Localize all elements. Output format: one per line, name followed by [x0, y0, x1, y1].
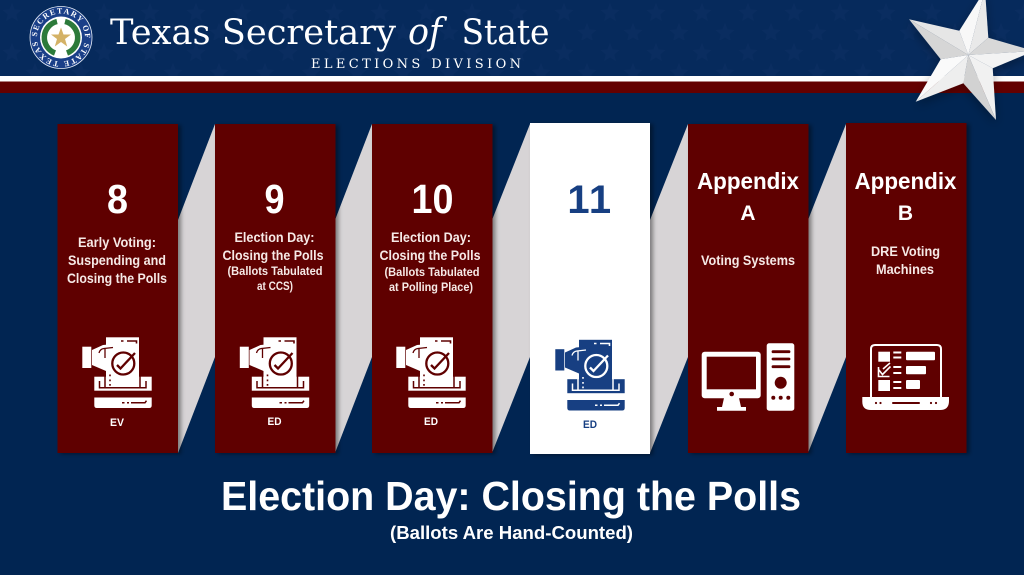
subheading: Ballots Are Hand-Counted: (Ballots Are Hand-Counted): [390, 523, 633, 543]
panel: chapter 9: at CCS): [257, 281, 293, 293]
panel: chapter 9: Election Day:: [234, 230, 314, 245]
panel: appendix B: Machines: [876, 262, 934, 277]
panel: chapter 10: [372, 124, 492, 453]
panel: appendix A: A: [740, 202, 756, 225]
icon: laptop ballot: [862, 345, 949, 410]
icon: ballot box EV: [82, 337, 152, 408]
panel: chapter 10: (Ballots Tabulated: [384, 267, 480, 279]
panel: chapter 9: [215, 124, 336, 453]
title: Texas Secretary of State: Texas Secretary: [110, 13, 396, 53]
panel: chapter 8: Early Voting:: [78, 235, 156, 250]
label: ED: ED: [583, 419, 597, 431]
icon: ballot box ED: [396, 337, 466, 408]
panel: chapter 8: 8: [107, 176, 128, 222]
label: ED: ED: [424, 416, 438, 428]
header banner: [0, 0, 1024, 93]
label: ED: ED: [268, 416, 282, 428]
panel: chapter 10: 10: [412, 176, 454, 222]
seal: Texas Secretary of State: TEXAS SECRETARY OF STATE: [32, 8, 90, 67]
panel: chapter 11 highlighted: 11: [567, 178, 613, 222]
panel: chapter 10: Closing the Polls: [380, 248, 480, 263]
label: EV: EV: [110, 417, 125, 429]
panel: chapter 8: Closing the Polls: [67, 271, 167, 286]
icon: desktop computer: [702, 343, 794, 411]
title: Texas Secretary of State: State: [462, 13, 550, 53]
panel: chapter 11 highlighted: [530, 123, 650, 454]
panel: appendix A: Voting Systems: [701, 253, 795, 268]
gray connectors between panels: [178, 124, 846, 453]
panel: chapter 9: Closing the Polls: [222, 248, 324, 263]
panel: appendix A: Appendix: [697, 168, 799, 194]
heading: Election Day: Closing the Polls: Election Day: Closing the Polls: [221, 473, 801, 519]
panel: chapter 10: at Polling Place): [389, 282, 473, 294]
title: Texas Secretary of State: of: [408, 12, 448, 53]
panel: chapter 9: 9: [264, 176, 284, 222]
panel: chapter 8: Suspending and: [68, 253, 166, 268]
icon: ballot box ED: [240, 337, 309, 408]
icon: silver star: [909, 0, 1024, 120]
icon: ballot box ED: [555, 340, 625, 410]
panel: appendix B: DRE Voting: [871, 244, 940, 259]
panel: chapter 10: Election Day:: [391, 230, 471, 245]
subtitle: Elections Division: ELECTIONS DIVISION: [311, 57, 521, 72]
panel: appendix B: [846, 123, 966, 453]
panel: appendix B: B: [898, 202, 913, 225]
panel: appendix A: [688, 124, 808, 453]
title: Texas Secretary of State: [110, 12, 550, 53]
panel: appendix B: Appendix: [854, 168, 957, 194]
panel: chapter 8: [58, 124, 178, 453]
panel: chapter 9: (Ballots Tabulated: [228, 266, 322, 278]
